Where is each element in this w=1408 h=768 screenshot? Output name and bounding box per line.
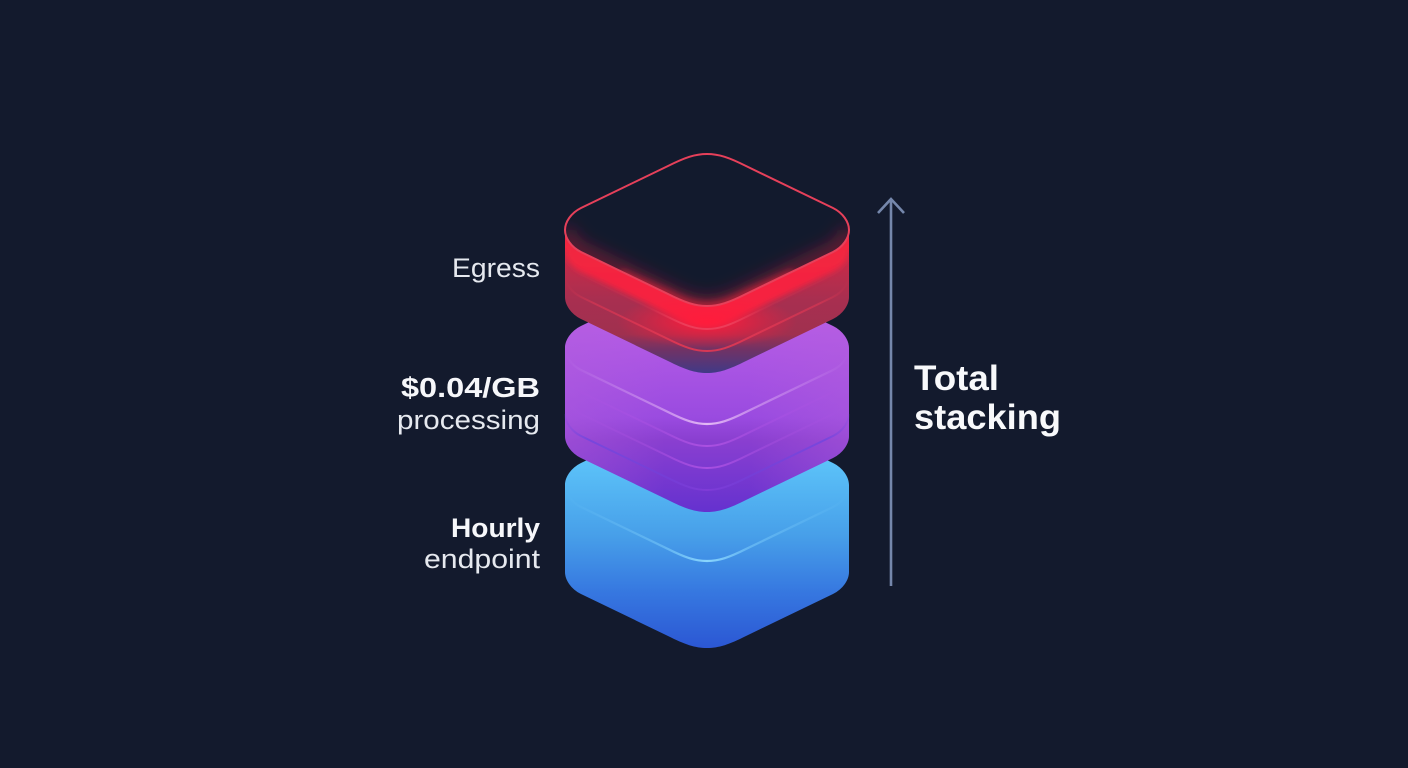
- purple layer: processing: [565, 272, 849, 512]
- label: $0.04/GB processing: $0.04/GB: [401, 372, 540, 403]
- red layer: egress: [555, 154, 859, 373]
- label: $0.04/GB processing: [397, 372, 540, 435]
- red block body: [565, 154, 849, 373]
- top face outline: [565, 154, 849, 306]
- bright red band: [565, 236, 849, 324]
- label: Egress: Egress: [452, 253, 540, 283]
- label: Hourly endpoint: [424, 513, 541, 574]
- top face: [565, 154, 849, 306]
- heading: Total stacking: [914, 359, 1061, 437]
- inner glow: [565, 230, 849, 306]
- red layer lines: [565, 253, 849, 329]
- heading: Total stacking: Total: [914, 359, 999, 398]
- label: $0.04/GB processing: processing: [397, 405, 540, 435]
- red band glow: [617, 295, 797, 349]
- arrow: total upward: [878, 199, 904, 586]
- heading: Total stacking: stacking: [914, 398, 1061, 437]
- label: Hourly endpoint: endpoint: [424, 544, 541, 574]
- label: Hourly endpoint: Hourly: [451, 513, 540, 543]
- blue layer: hourly endpoint: [565, 409, 849, 648]
